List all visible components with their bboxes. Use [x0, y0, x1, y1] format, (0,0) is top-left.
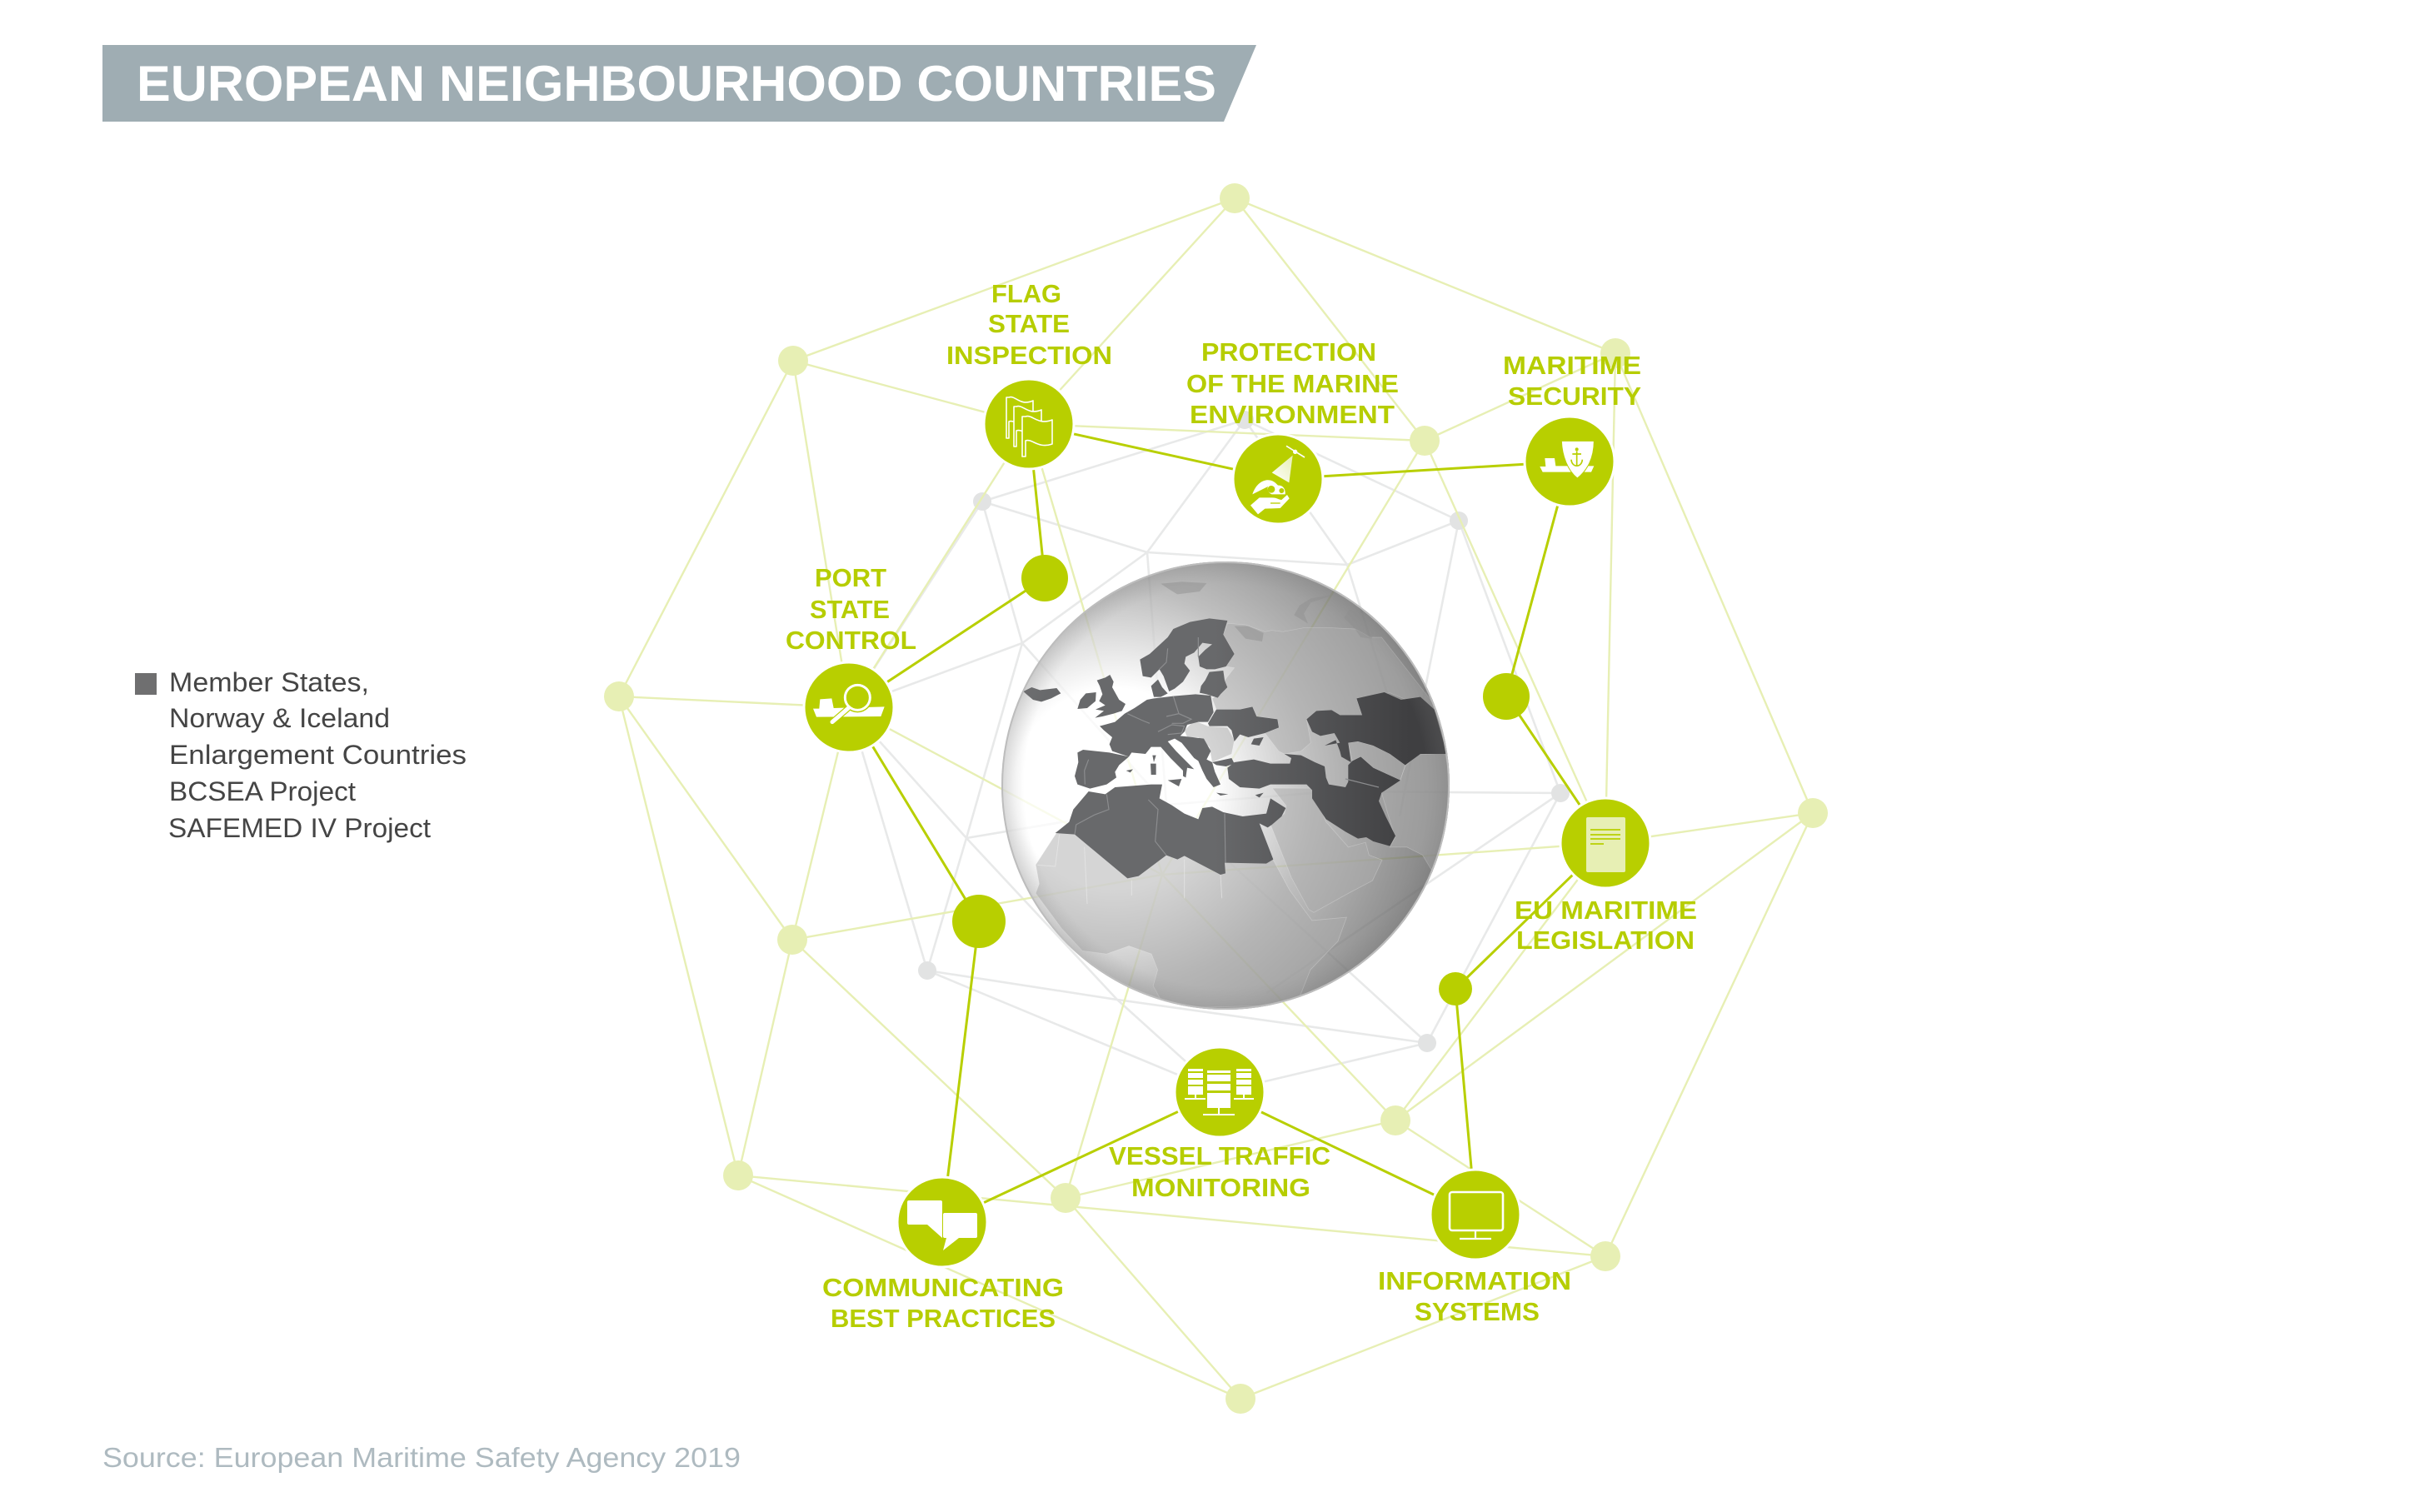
label: protection of the marine environment: PROTECTION: [1201, 337, 1376, 367]
label: information systems: INFORMATION: [1378, 1266, 1571, 1295]
light land: South Asia: [1381, 753, 1452, 870]
label: EU maritime legislation: EU MARITIME: [1515, 896, 1697, 925]
network: pale green connection lines and nodes: [604, 183, 1828, 1414]
legend: Member States,: [169, 667, 369, 697]
node: flag state inspection: [984, 379, 1074, 469]
legend: Norway & Iceland: [169, 703, 390, 733]
icon: ship and anchor shield: [1540, 441, 1594, 478]
label: information systems: SYSTEMS: [1415, 1297, 1540, 1326]
label: vessel traffic monitoring: VESSEL TRAFFIC: [1109, 1141, 1330, 1170]
dark land: member states and neighbours: [1023, 618, 1447, 878]
globe with European neighbourhood map: [1001, 561, 1452, 1010]
icon: servers: [1185, 1069, 1254, 1115]
label: port state control: [786, 563, 916, 655]
label: port state control: CONTROL: [786, 626, 916, 655]
country borders: [1075, 637, 1379, 863]
icon: document: [1586, 817, 1625, 872]
node: EU maritime legislation: [1560, 798, 1650, 888]
icon: monitor: [1450, 1192, 1503, 1239]
legend: [135, 667, 467, 843]
node: information systems: [1430, 1170, 1520, 1260]
label: port state control: PORT: [815, 563, 886, 592]
light land: Africa: [1036, 825, 1346, 1008]
source note: Source: European Maritime Safety Agency 2019: [102, 1442, 741, 1473]
node: vessel traffic monitoring: [1175, 1047, 1265, 1137]
network: grey connection lines and nodes: [849, 411, 1570, 1092]
legend: BCSEA Project: [169, 776, 356, 806]
label: flag state inspection: [946, 279, 1112, 370]
icon: ship under magnifier: [813, 682, 885, 722]
label: communicating best practices: [822, 1273, 1064, 1333]
label: vessel traffic monitoring: MONITORING: [1131, 1173, 1310, 1202]
label: communicating best practices: BEST PRACTICES: [831, 1304, 1056, 1333]
light land: Russia and non-member Europe: [1185, 623, 1435, 781]
node: port state control: [804, 662, 894, 752]
label: EU maritime legislation: [1515, 896, 1697, 955]
label: maritime security: [1503, 351, 1641, 411]
node: maritime security: [1525, 417, 1615, 506]
label: protection of the marine environment: OF THE MARINE: [1186, 369, 1399, 398]
label: port state control: STATE: [810, 595, 890, 624]
icon: speech bubbles: [907, 1200, 977, 1250]
label: flag state inspection: STATE: [988, 309, 1070, 338]
icon: satellite over hand and wave: [1250, 446, 1305, 514]
label: flag state inspection: FLAG: [991, 279, 1061, 308]
label: vessel traffic monitoring: [1109, 1141, 1330, 1202]
arctic islands: [1161, 581, 1375, 641]
label: maritime security: SECURITY: [1508, 382, 1641, 411]
legend: Enlargement Countries: [169, 740, 467, 770]
title banner: [102, 45, 1256, 122]
node: communicating best practices: [897, 1177, 987, 1267]
label: protection of the marine environment: [1186, 337, 1399, 429]
label: information systems: [1378, 1266, 1571, 1326]
network: bright green links between activities: [849, 424, 1605, 1222]
legend: SAFEMED IV Project: [168, 813, 431, 843]
label: EU maritime legislation: LEGISLATION: [1516, 926, 1695, 955]
icon: three flags: [1006, 397, 1052, 457]
label: maritime security: MARITIME: [1503, 351, 1641, 380]
label: flag state inspection: INSPECTION: [946, 341, 1112, 370]
title banner: EUROPEAN NEIGHBOURHOOD COUNTRIES: [137, 56, 1216, 112]
label: communicating best practices: COMMUNICATING: [822, 1273, 1064, 1302]
light land: Arabia: [1270, 788, 1382, 912]
node: protection of the marine environment: [1233, 434, 1323, 524]
label: protection of the marine environment: ENVIRONMENT: [1190, 400, 1395, 429]
